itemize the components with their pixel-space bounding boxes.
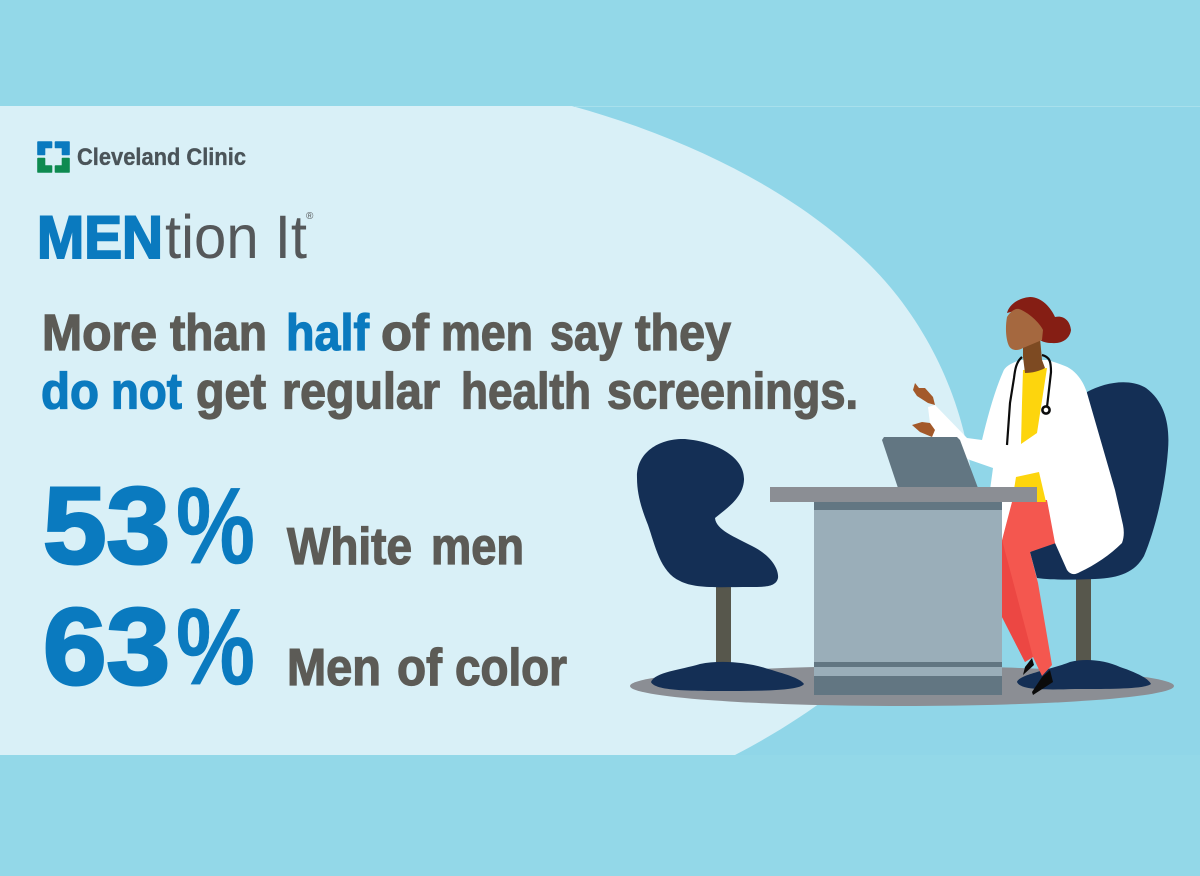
heading: screening statement: More <box>42 304 157 361</box>
logo: Cleveland Clinic <box>38 142 246 172</box>
heading: screening statement: screenings. <box>607 362 858 420</box>
laptop <box>882 437 978 488</box>
stat: 53% white men: 53 <box>43 465 170 587</box>
heading: screening statement: than <box>170 304 267 361</box>
heading: screening statement: they <box>635 304 732 361</box>
heading: screening statement: regular <box>282 362 440 420</box>
hands <box>913 383 935 405</box>
heading: screening statement: men <box>441 304 533 361</box>
stat: 53% white men: % <box>176 465 255 587</box>
title: MENtion It <box>37 203 314 271</box>
heading: screening statement: get <box>196 362 266 420</box>
stat: 63% men of color: 63 <box>43 586 170 708</box>
title: MENtion It: MEN <box>37 204 163 271</box>
heading: screening statement: health <box>461 362 591 420</box>
heading: screening statement: not <box>111 362 182 420</box>
legs <box>1002 500 1056 676</box>
heading: screening statement: do <box>41 362 99 420</box>
heading: screening statement: say <box>550 304 623 361</box>
stat: 63% men of color <box>43 586 567 708</box>
lab coat <box>928 360 1124 574</box>
left chair <box>637 439 804 691</box>
heading: screening statement: of <box>381 304 430 361</box>
illustration: doctor at desk <box>630 297 1174 706</box>
shoes <box>1023 658 1034 675</box>
logo wordmark: Cleveland Clinic <box>77 144 246 171</box>
stat: 53% white men <box>43 465 524 587</box>
shirt <box>1012 368 1047 502</box>
stat: 53% white men: White <box>287 518 412 576</box>
title: MENtion It: ® <box>306 211 314 222</box>
floor ellipse <box>630 666 1174 706</box>
stethoscope <box>1007 357 1022 445</box>
stat: 63% men of color: of <box>397 639 443 697</box>
desk <box>770 487 1037 695</box>
panel: light curved area <box>0 106 972 755</box>
heading: screening statement: half <box>286 304 370 361</box>
icon: Cleveland Clinic cross <box>38 142 69 172</box>
stat: 63% men of color: % <box>176 586 255 708</box>
panel: central band <box>0 106 1200 755</box>
doctor figure <box>912 297 1124 695</box>
right chair <box>1017 382 1168 689</box>
title: MENtion It: tion It <box>165 203 307 271</box>
hair <box>1007 297 1071 343</box>
stat: 53% white men: men <box>431 518 524 576</box>
heading: screening statement <box>41 304 858 420</box>
stat: 63% men of color: color <box>455 639 567 697</box>
neck <box>1023 338 1045 373</box>
face <box>1006 309 1043 350</box>
stat: 63% men of color: Men <box>287 639 381 697</box>
